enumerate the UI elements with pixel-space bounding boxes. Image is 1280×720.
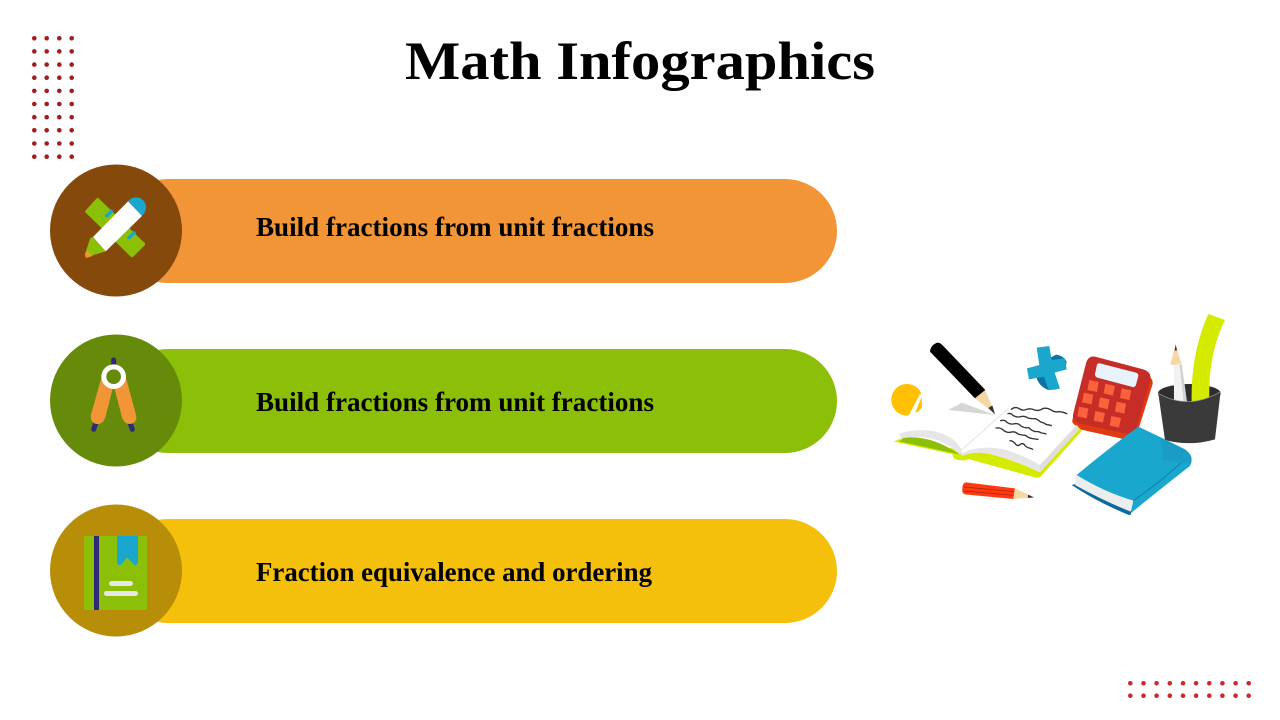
yellow bar <box>116 519 837 623</box>
icon: red pencil <box>962 482 1034 499</box>
dark green circle <box>50 334 182 466</box>
title: Math Infographics <box>405 31 875 91</box>
icon: black pencil <box>930 343 995 415</box>
dot pattern: top left <box>32 36 74 159</box>
label: Build fractions from unit fractions <box>256 212 654 242</box>
icon: compass <box>91 360 136 429</box>
handwriting scribbles <box>996 408 1067 449</box>
icon: yellow ball <box>891 384 923 417</box>
panel: row 1 <box>50 164 837 296</box>
icon: blue book <box>1072 427 1192 515</box>
icon: calculator <box>1072 356 1153 440</box>
icon: pencil and ruler <box>85 197 146 258</box>
green bar <box>116 349 837 453</box>
label: Build fractions from unit fractions <box>256 387 654 417</box>
icon: pencil cup with ruler <box>1158 314 1225 443</box>
label: Fraction equivalence and ordering <box>256 557 652 587</box>
dot pattern: bottom right <box>1128 681 1251 698</box>
icon: plus sign <box>1027 346 1067 390</box>
brown circle <box>50 164 182 296</box>
panel: row 2 <box>50 334 837 466</box>
gold circle <box>50 504 182 636</box>
icon: notebook <box>84 536 147 610</box>
illustration: math supplies <box>891 314 1225 515</box>
icon: open book <box>894 408 1082 478</box>
panel: row 3 <box>50 504 837 636</box>
orange bar <box>116 179 837 283</box>
